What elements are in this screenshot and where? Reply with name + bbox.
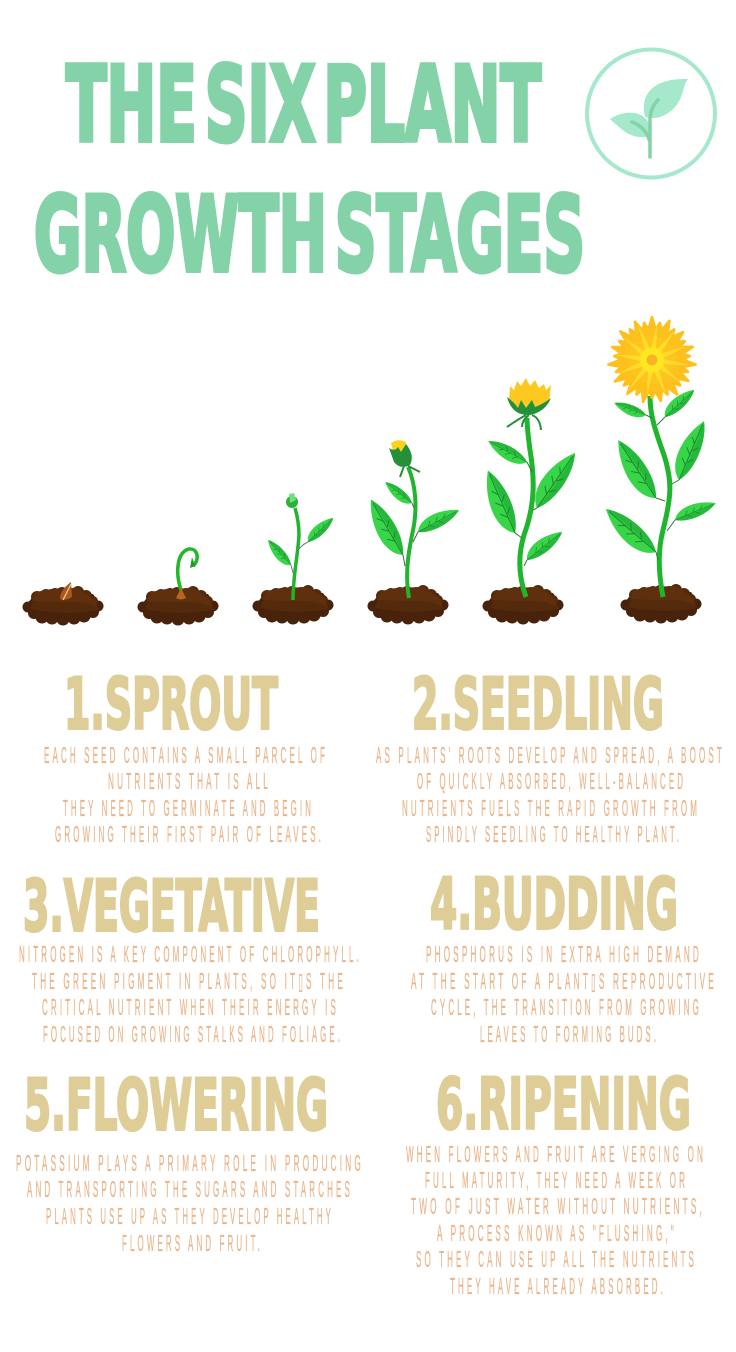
panel: 2. seedling <box>376 664 725 847</box>
stage 6: full bloom <box>598 316 718 624</box>
icon: sprout in circle <box>587 50 715 178</box>
panel: 5. flowering <box>16 1064 364 1256</box>
text block: ripening description <box>406 1141 706 1299</box>
stage 5: opening flower <box>477 378 582 624</box>
text block: seedling description <box>376 742 725 847</box>
text block: budding description <box>411 941 717 1047</box>
heading: 3.vegetative: 3.VEGETATIVE <box>23 866 320 948</box>
sunflower head <box>607 316 697 404</box>
stage 3: young plant with two leaves <box>252 493 336 624</box>
panel: 4. budding <box>411 864 717 1047</box>
stage 4: budding plant <box>361 440 462 624</box>
heading: 5.flowering: 5.FLOWERING <box>24 1064 328 1146</box>
text block: sprout description <box>44 742 328 847</box>
panel: 3. vegetative <box>19 866 362 1047</box>
stage 2: curled sprout <box>138 549 218 626</box>
text block: vegetative description <box>19 941 362 1047</box>
panel: 6. ripening <box>406 1064 706 1299</box>
text: NUTRIENTS THAT IS ALL <box>108 768 271 794</box>
title <box>34 46 585 296</box>
text block: flowering description: FLOWERS AND FRUIT. <box>122 1230 263 1256</box>
panel: 1. sprout <box>44 664 328 847</box>
stage 1: seed in soil <box>22 582 104 626</box>
heading: 1.sprout: 1.SPROUT <box>64 664 278 746</box>
text block: flowering description <box>16 1150 364 1256</box>
plant growth illustration <box>22 316 718 626</box>
